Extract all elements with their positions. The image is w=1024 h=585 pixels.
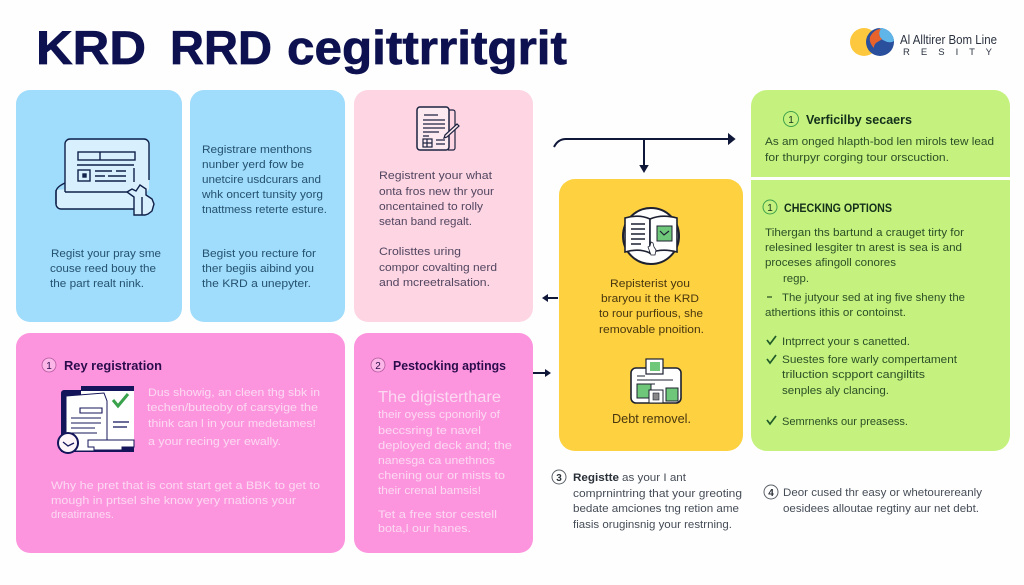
panel: pestocking aptings: bota,l our hanes. xyxy=(378,523,471,535)
checklist: senples aly clancing. xyxy=(782,385,889,397)
panel: yellow debt removal: Debt removel. xyxy=(612,411,691,426)
panel: yellow debt removal: Repisterist you xyxy=(610,278,690,290)
panel: blue card two: Registrare menthons xyxy=(202,144,312,156)
arrow: right to yellow card xyxy=(533,369,551,377)
number badge 1 xyxy=(42,358,56,372)
panel: checking options xyxy=(751,180,1010,451)
note 3: comprnintring that your greoting xyxy=(573,488,742,500)
title: KRD xyxy=(36,21,146,74)
panel: blue card two: ther begiis aibind you xyxy=(202,263,314,275)
panel: light pink card: and mcreetralsation. xyxy=(379,277,490,289)
number badge: 1 xyxy=(788,115,794,126)
panel: blue card one: Regist your pray sme xyxy=(51,248,161,260)
note 3: bedate amciones tng retion ame xyxy=(573,503,739,515)
number badge 2 xyxy=(371,358,385,372)
panel: blue card two: tnattmess reterte esture. xyxy=(202,204,327,216)
panel: blue card one: the part realt nink. xyxy=(50,278,144,290)
checklist: triluction scpport cangiltits xyxy=(782,369,925,381)
panel: light pink card: setan band regalt. xyxy=(379,216,472,228)
checklist: Semrnenks our preasess. xyxy=(782,416,908,428)
note 4 xyxy=(764,485,982,515)
panel: blue card two: whk oncert tunsity yorg xyxy=(201,189,323,201)
panel: key registration: mough in prtsel she know yery rnations your xyxy=(51,495,296,507)
panel: checking options: athertions ithis or contoinst. xyxy=(765,307,906,319)
icon: document with pen xyxy=(417,107,459,150)
heading: Pestocking aptings xyxy=(393,358,506,373)
heading: Rey registration xyxy=(64,358,162,373)
checklist: Suestes fore warly compertament xyxy=(782,354,958,366)
panel: key registration: Dus showig, an cleen thg sbk in xyxy=(148,387,320,399)
panel: light pink card: oncentained to rolly xyxy=(379,201,483,213)
panel: key registration: Why he pret that is cont start get a BBK to get to xyxy=(51,480,320,492)
note 3: 3 xyxy=(556,473,562,484)
note 3: Registte xyxy=(573,472,619,484)
note 3: as your I ant xyxy=(622,472,687,484)
panel: pestocking aptings: beccsring te navel xyxy=(378,425,481,437)
panel: blue card two: nunber yerd fow be xyxy=(202,159,304,171)
panel: light pink card: Registrent your what xyxy=(379,170,493,182)
panel: verification xyxy=(751,90,1010,177)
panel: verification: for thurpyr corging tour orscuction. xyxy=(765,152,949,164)
panel: blue card one: couse reed bouy the xyxy=(50,263,156,275)
panel: checking options: Tihergan ths bartund a crauget tirty for xyxy=(765,227,964,239)
panel: blue card two: Begist you recture for xyxy=(202,248,316,260)
panel: pestocking aptings: their crenal bamsis! xyxy=(378,485,481,497)
panel: pestocking aptings: their oyess cponorily of xyxy=(378,409,501,421)
panel: pestocking aptings: nanesga ca unethnos xyxy=(378,455,495,467)
panel: checking options: regp. xyxy=(783,273,809,285)
panel: pestocking aptings xyxy=(354,333,533,553)
logo xyxy=(850,28,997,58)
panel: light pink card: compor covalting nerd xyxy=(379,262,497,274)
checklist xyxy=(767,336,958,428)
number badge: 1 xyxy=(767,203,773,214)
panel: key registration: a your recing yer ewally. xyxy=(148,436,281,448)
panel: pestocking aptings: deployed deck and; the xyxy=(378,440,512,452)
panel: key registration: think can l in your medetames! xyxy=(148,418,316,430)
note 4: Deor cused thr easy or whetourereanly xyxy=(783,487,982,499)
number badge 1: 1 xyxy=(46,361,52,372)
panel: verification: As am onged hlapth-bod len mirols tew lead xyxy=(765,136,994,148)
logo: Al Alltirer Bom Line xyxy=(900,32,997,47)
panel: light pink card xyxy=(354,90,533,322)
panel: key registration xyxy=(16,333,345,553)
number badge xyxy=(763,200,777,214)
panel: checking options: The jutyour sed at ing five sheny the xyxy=(782,292,965,304)
note 4: oesidees alloutae regtiny aur net debt. xyxy=(783,503,979,515)
arrow: branching connector xyxy=(554,135,734,171)
panel: light pink card: onta fros new thr your xyxy=(379,186,494,198)
icon: documents with check xyxy=(58,386,134,453)
panel: key registration: techen/buteoby of carsyige the xyxy=(147,402,318,414)
panel: checking options: proceses afingoll conores xyxy=(765,257,896,269)
arrow: left to pink card xyxy=(542,294,558,302)
title: cegittrritgrit xyxy=(287,21,567,74)
panel: checking options: relesined lesgiter tn arest is sea is and xyxy=(765,242,962,254)
panel: pestocking aptings: Tet a free stor cestell xyxy=(378,509,497,521)
heading: CHECKING OPTIONS xyxy=(784,203,892,215)
title xyxy=(36,21,567,74)
panel: key registration: dreatirranes. xyxy=(51,509,114,521)
checklist: Intprrect your s canetted. xyxy=(782,336,910,348)
title: RRD xyxy=(170,21,272,74)
logo: R E S I T Y xyxy=(903,47,993,58)
panel: yellow debt removal xyxy=(559,179,743,451)
number badge xyxy=(784,112,798,126)
panel: blue card two: the KRD a unepyter. xyxy=(202,278,311,290)
panel: blue card two xyxy=(190,90,345,322)
icon: debt card xyxy=(631,359,681,403)
note 3 xyxy=(552,470,742,531)
note 3: fiasis oruginsnig your restrning. xyxy=(573,519,732,531)
icon: open book xyxy=(623,208,679,264)
note 4: 4 xyxy=(768,488,774,499)
panel: light pink card: Crolisttes uring xyxy=(379,246,461,258)
panel: blue card one xyxy=(16,90,182,322)
panel: pestocking aptings: chening our or mists to xyxy=(378,470,505,482)
icon: registration screen xyxy=(56,139,154,215)
heading: Verficilby secaers xyxy=(806,112,912,127)
panel: blue card two: unetcire usdcurars and xyxy=(202,174,321,186)
panel: yellow debt removal: braryou it the KRD xyxy=(601,293,699,305)
number badge 2: 2 xyxy=(375,361,381,372)
panel: pestocking aptings: The digisterthare xyxy=(378,389,501,406)
panel: yellow debt removal: removable pnoition. xyxy=(599,324,704,336)
panel: yellow debt removal: to rour purfious, she xyxy=(599,308,703,320)
